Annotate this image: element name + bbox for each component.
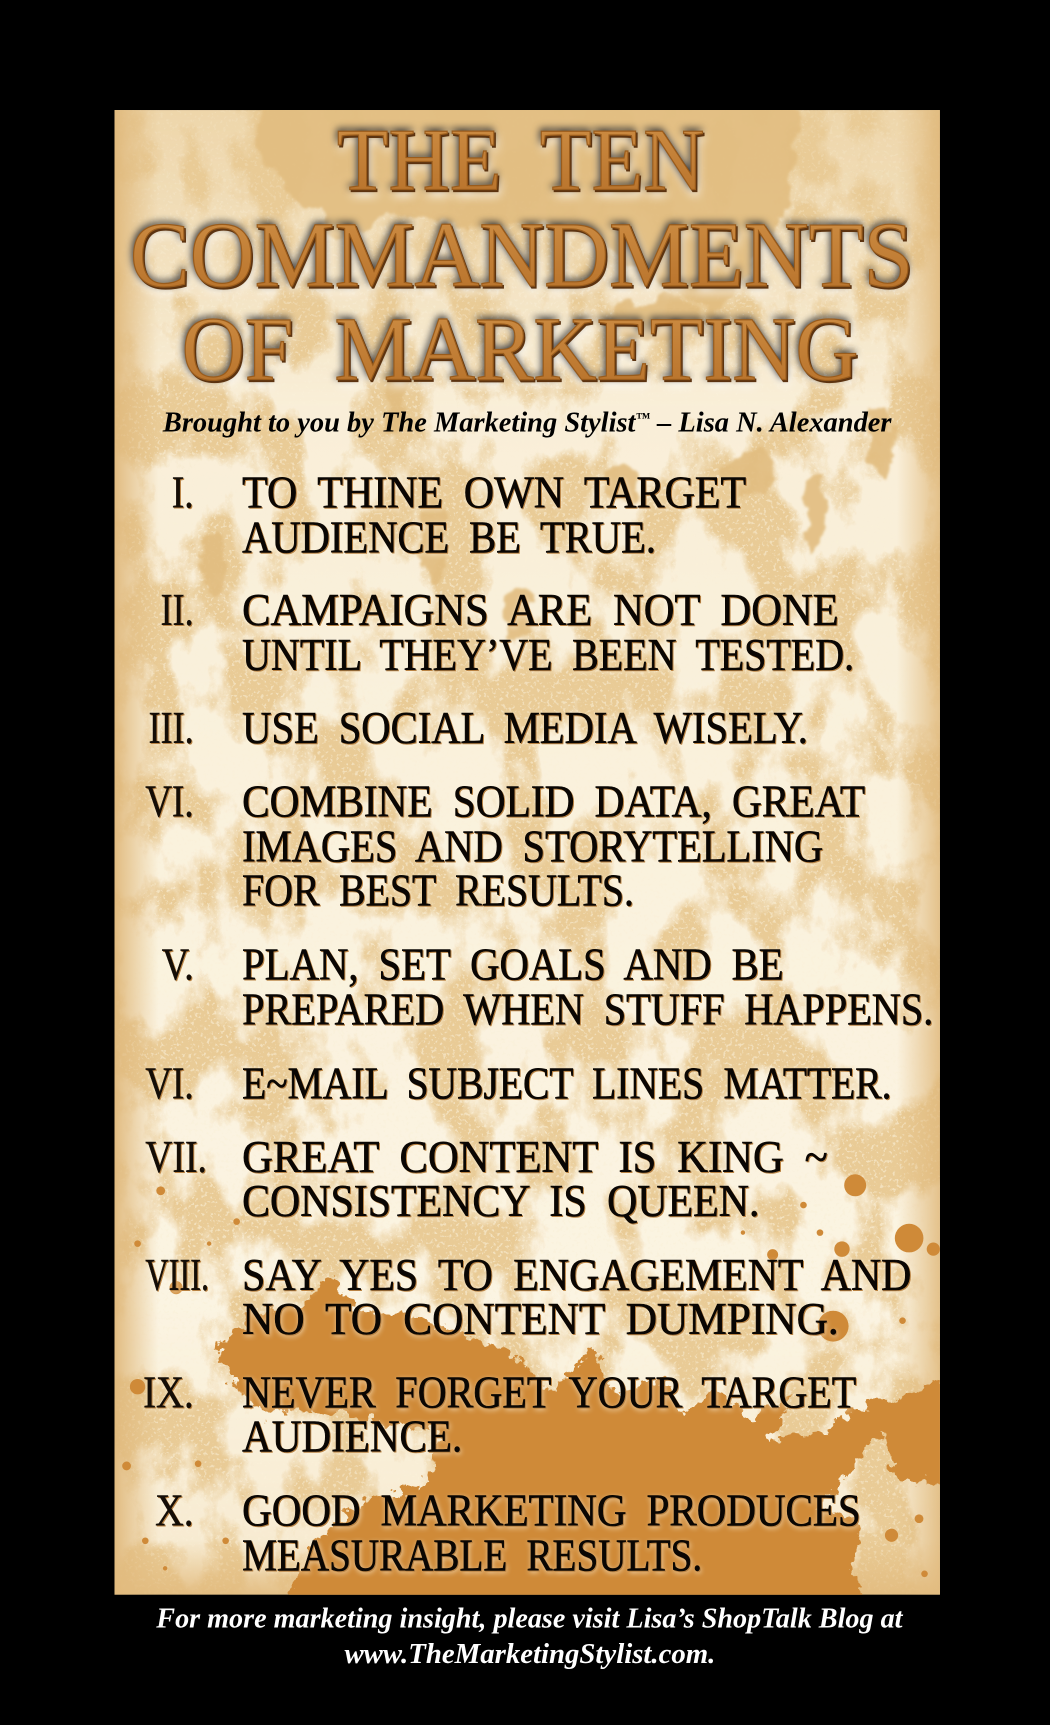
commandment X: GOOD MARKETING PRODUCES [242,1485,861,1535]
commandments list [143,467,933,1580]
subtitle: Brought to you by The Marketing Stylist [163,407,629,438]
subtitle: ™ [635,411,651,427]
commandment IX: AUDIENCE. [242,1412,462,1462]
footer [155,1604,904,1670]
subtitle: – Lisa N. Alexander [650,407,893,438]
commandment III: USE SOCIAL MEDIA WISELY. [242,703,808,753]
commandment VI: VI. [145,1058,194,1108]
commandment VII [145,1132,828,1226]
commandment X [155,1485,861,1580]
commandment I: I. [172,467,194,517]
commandment IX: IX. [143,1368,194,1418]
commandment II: CAMPAIGNS ARE NOT DONE [242,585,839,635]
title [130,111,914,400]
commandment VIII: VIII. [145,1250,209,1300]
commandment VII: CONSISTENCY IS QUEEN. [242,1176,759,1226]
panel: parchment [114,99,940,1595]
commandment X: X. [155,1485,194,1535]
title line 2: COMMANDMENTS [130,204,914,307]
commandment IV (printed VI): FOR BEST RESULTS. [242,866,634,916]
commandment VIII: NO TO CONTENT DUMPING. [242,1294,839,1344]
commandment IX [143,1368,856,1462]
commandment IX: NEVER FORGET YOUR TARGET [242,1368,856,1418]
footer line 2: www.TheMarketingStylist.com. [344,1639,715,1670]
commandment V [162,939,933,1035]
commandment I: TO THINE OWN TARGET [242,467,746,517]
commandment IV (printed VI): COMBINE SOLID DATA, GREAT [242,777,865,827]
commandment II: II. [161,585,194,635]
commandment X: MEASURABLE RESULTS. [242,1530,702,1580]
commandment VIII: SAY YES TO ENGAGEMENT AND [242,1250,911,1300]
commandment III: III. [149,703,194,753]
commandment V: PREPARED WHEN STUFF HAPPENS. [242,985,933,1035]
title line 3: OF MARKETING [182,299,858,400]
commandment VII: GREAT CONTENT IS KING ~ [242,1132,828,1182]
commandment II [161,585,854,680]
orange splatter [122,1174,958,1618]
commandment VIII [145,1250,911,1344]
edge vignette [114,110,158,1595]
commandment VI: E~MAIL SUBJECT LINES MATTER. [242,1058,892,1108]
commandment VII: VII. [145,1132,207,1182]
commandment II: UNTIL THEY’VE BEEN TESTED. [242,630,854,680]
footer line 1: For more marketing insight, please visit Lisa’s ShopTalk Blog at [155,1604,904,1635]
commandment IV (printed VI): IMAGES AND STORYTELLING [242,822,823,872]
commandment IV (printed VI): VI. [145,777,194,827]
commandment V: V. [162,939,194,989]
commandment V: PLAN, SET GOALS AND BE [242,939,784,989]
commandment I [172,467,746,562]
commandment I: AUDIENCE BE TRUE. [242,512,656,562]
title line 1: THE TEN [337,111,704,209]
commandment IV (printed VI) [145,777,865,916]
